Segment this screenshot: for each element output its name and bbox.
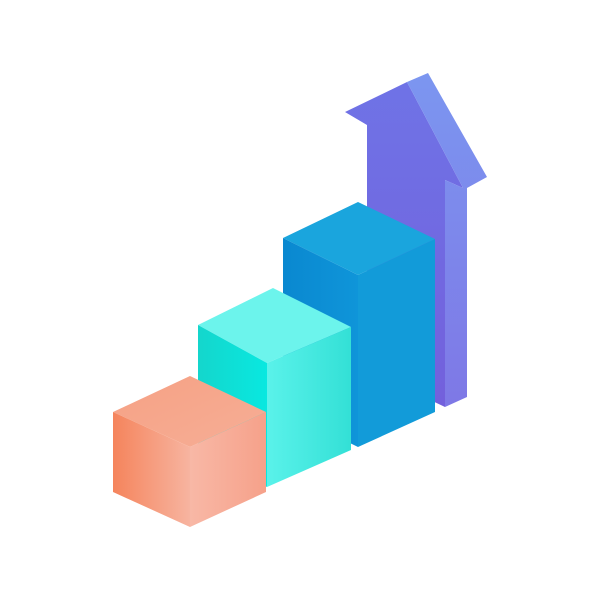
arrow bbox=[345, 73, 487, 407]
bar: blue tall bbox=[283, 202, 435, 447]
bar: orange short bbox=[113, 376, 266, 527]
bar: teal medium bbox=[198, 288, 351, 487]
